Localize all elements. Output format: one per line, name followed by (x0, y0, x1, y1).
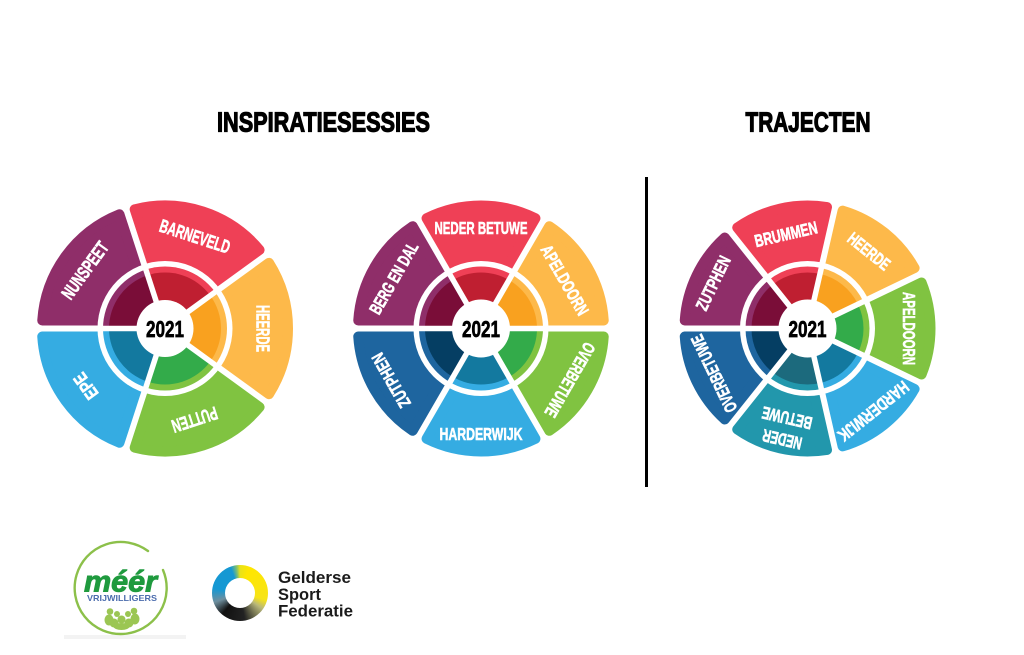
center badge: 2021 (778, 300, 836, 358)
segment: Neder Betuwe: NEDER BETUWE (434, 218, 528, 238)
logo base strip (64, 635, 186, 639)
logo subtitle: VRIJWILLIGERS (87, 593, 157, 603)
segment: Harderwijk (427, 375, 535, 451)
ring hole (225, 578, 255, 608)
segment: Neder Betuwe (427, 206, 535, 282)
logo: gelderse sport federatie wordmark (278, 569, 353, 620)
segment: Putten (116, 351, 265, 466)
inner hub with colored rings (412, 261, 550, 396)
segment: Overbetuwe (494, 305, 615, 437)
segment: Overbetuwe: OVERBETUWE (687, 331, 741, 416)
segment: Heerde (801, 204, 920, 320)
segment: Zutphen: ZUTPHEN (368, 349, 415, 411)
segment: Brummen (735, 198, 842, 292)
logo: meer vrijwilligers (64, 542, 186, 639)
segment: Berg en Dal (347, 220, 468, 352)
vertical divider between sections (645, 177, 648, 487)
icon: group of people (104, 608, 140, 630)
logo wordmark: méér (84, 566, 159, 598)
segment: Zutphen: ZUTPHEN (692, 253, 735, 314)
center badge: 2021: 2021 (146, 316, 184, 342)
segment: Putten: PUTTEN (169, 403, 220, 437)
logo: gelderse sport federatie wordmark: Federatie (278, 602, 353, 620)
segment: Harderwijk: HARDERWIJK (440, 424, 523, 444)
segment: Epe (27, 302, 167, 454)
segment: Neder Betuwe (735, 365, 842, 459)
logo ring (75, 542, 167, 634)
inner hub with colored rings (93, 258, 232, 399)
segment: Overbetuwe: OVERBETUWE (541, 339, 599, 421)
logo: gelderse sport federatie wordmark: Gelderse (278, 569, 351, 587)
segment: Heerde: HEERDE (844, 228, 894, 274)
segment: Neder Betuwe: BETUWE (760, 402, 814, 433)
wheel: trajecten seven segments (677, 198, 931, 459)
segment: Overbetuwe (677, 308, 784, 423)
segment: Epe: EPE (69, 369, 102, 404)
center badge: 2021 (136, 300, 194, 357)
inner hub with colored rings (740, 261, 875, 396)
segment: Brummen: BRUMMEN (753, 217, 819, 251)
segment: Apeldoorn (855, 282, 931, 375)
segment: Harderwijk: HARDERWIJK (834, 377, 913, 446)
logo: gelderse sport federatie ring (212, 565, 268, 621)
center badge: 2021: 2021 (462, 316, 500, 342)
segment: Heerde (210, 263, 288, 394)
segment: Apeldoorn (494, 220, 615, 352)
segment: Barneveld (116, 191, 265, 306)
center badge: 2021 (452, 300, 510, 358)
wheel: inspiratiesessies six segments (347, 206, 615, 451)
heading: trajecten: TRAJECTEN (746, 106, 870, 138)
segment: Harderwijk (801, 337, 920, 453)
center badge: 2021: 2021 (788, 316, 827, 342)
segment: Nunspeet (27, 203, 167, 355)
segment: Heerde: HEERDE (252, 305, 274, 352)
segment: Barneveld: BARNEVELD (157, 215, 233, 258)
wheel: inspiratiesessies five segments (27, 191, 288, 466)
segment: Berg en Dal: BERG EN DAL (365, 238, 423, 318)
segment: Apeldoorn: APELDOORN (899, 292, 919, 365)
heading: inspiratiesessies: INSPIRATIESESSIES (217, 106, 430, 138)
segment: Apeldoorn: APELDOORN (537, 241, 593, 319)
segment: Zutphen (677, 234, 784, 349)
segment: Nunspeet: NUNSPEET (57, 237, 113, 303)
segment: Zutphen (347, 305, 468, 437)
logo: gelderse sport federatie wordmark: Sport (278, 586, 321, 604)
segment: Neder Betuwe: NEDER (760, 425, 804, 454)
